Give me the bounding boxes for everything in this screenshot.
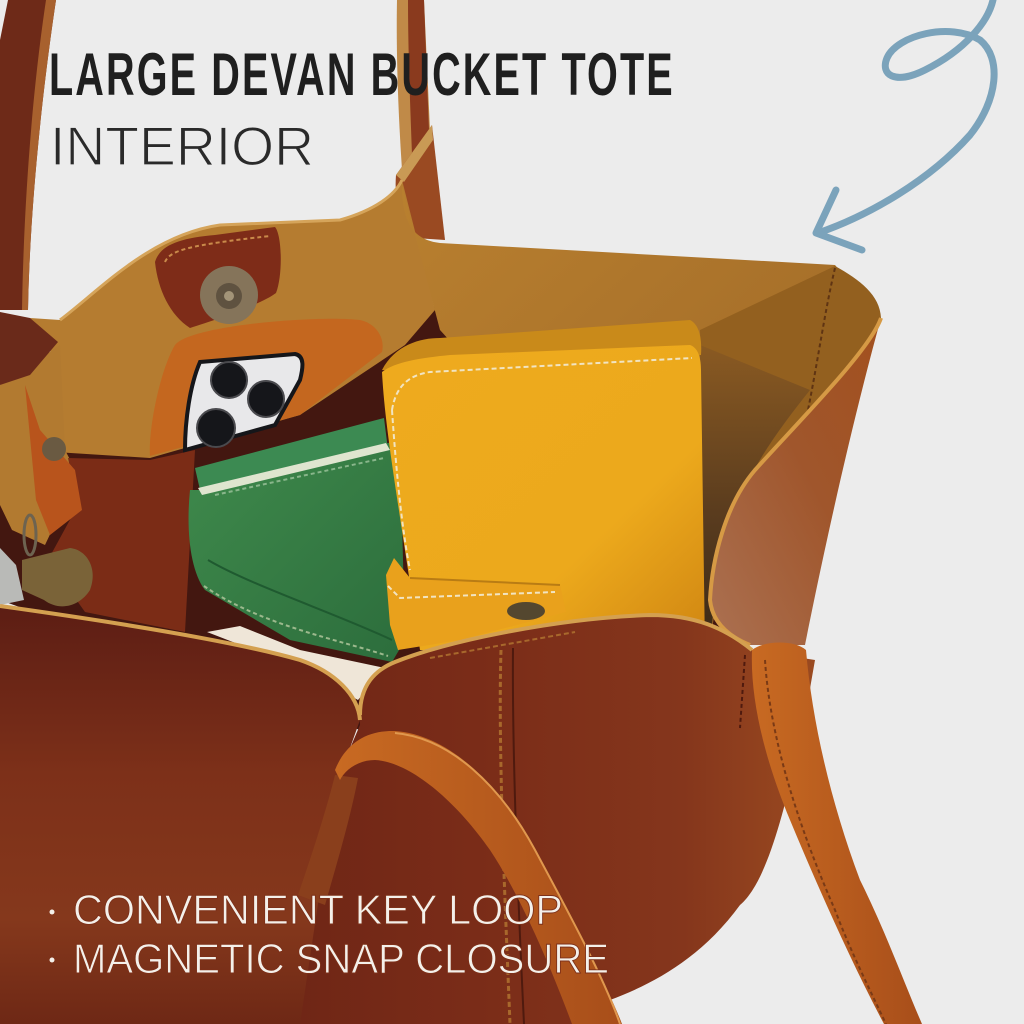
centre shoulder strap	[396, 0, 445, 240]
bullet: magnetic closure: MAGNETIC SNAP CLOSURE	[73, 935, 609, 982]
feature list	[50, 886, 609, 982]
interior underlay	[0, 305, 730, 730]
near handle, left stem	[298, 775, 358, 905]
near front handle	[335, 731, 622, 1024]
bullet: key loop: CONVENIENT KEY LOOP	[73, 886, 563, 933]
inner pocket wall	[48, 450, 195, 632]
left shoulder strap	[0, 0, 56, 310]
yellow wallet	[382, 320, 705, 650]
subtitle: INTERIOR	[50, 115, 314, 177]
right exterior side panel	[710, 318, 881, 645]
phone lenses	[197, 362, 284, 447]
phone in orange case	[150, 319, 383, 456]
front right panel	[290, 615, 815, 1024]
title: LARGE DEVAN BUCKET TOTE	[49, 41, 673, 108]
front left panel	[0, 606, 360, 1024]
magnetic snap tab	[155, 227, 281, 328]
white tissue	[207, 626, 385, 700]
blue hand-drawn arrow	[816, 0, 994, 250]
green wallet	[189, 418, 405, 662]
interior far wall (left, suede)	[0, 180, 435, 545]
yellow wallet strap	[386, 558, 566, 650]
interior right wall (suede)	[402, 185, 881, 630]
far right handle	[752, 642, 922, 1024]
key loop tab and keys	[0, 385, 93, 606]
